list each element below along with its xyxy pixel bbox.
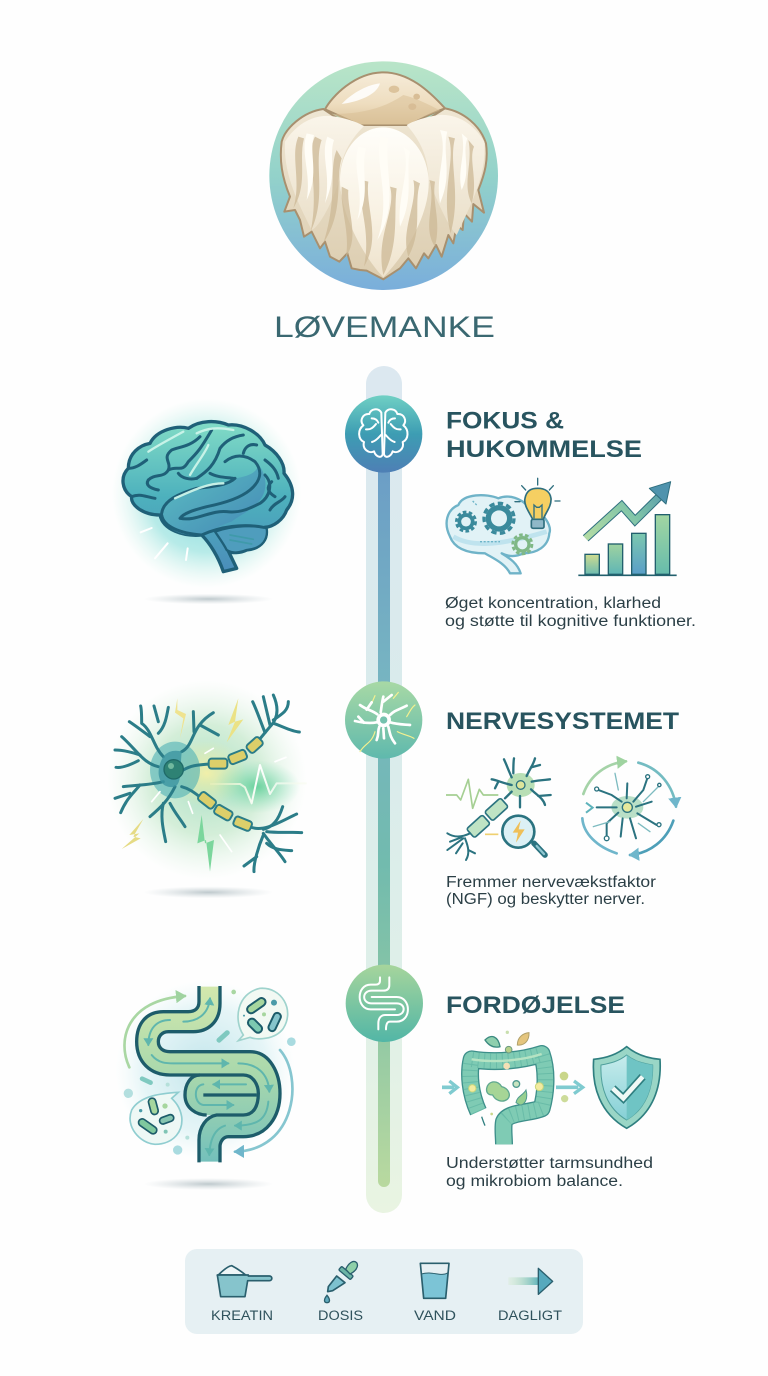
text: focus description <box>445 595 696 630</box>
illustration: neuron <box>107 680 307 898</box>
text: nerve description <box>446 874 656 908</box>
icon: water glass <box>420 1263 449 1298</box>
icon: dropper <box>324 1261 357 1303</box>
heading: Fokus & Hukommelse: HUKOMMELSE <box>446 436 642 463</box>
label: kreatin: KREATIN <box>211 1308 273 1323</box>
node: intestine <box>346 965 423 1042</box>
hero: lion's mane mushroom <box>269 61 498 290</box>
heading: Fokus & Hukommelse <box>446 408 642 463</box>
heading: Fordøjelse: FORDØJELSE <box>446 992 625 1019</box>
heading: Nervesystemet: NERVESYSTEMET <box>446 708 679 735</box>
icon: arrow <box>508 1268 553 1294</box>
label: vand: VAND <box>414 1308 456 1323</box>
icons: axon with magnifier and neuron cycle <box>446 758 676 860</box>
text: focus description: og støtte til kognitive funktioner. <box>445 613 696 630</box>
text: digestion description: og mikrobiom balance. <box>446 1173 623 1190</box>
label: dagligt: DAGLIGT <box>498 1308 562 1323</box>
icons: colon and protective shield <box>442 1031 660 1144</box>
label: dosis: DOSIS <box>318 1308 363 1323</box>
text: nerve description: (NGF) og beskytter nerver. <box>446 891 645 908</box>
timeline track <box>366 366 402 1213</box>
text: digestion description <box>446 1155 653 1190</box>
illustration: gut flow <box>115 980 296 1190</box>
icons: brain with gears, bulb and growth chart <box>447 478 677 575</box>
illustration: glowing brain <box>112 398 302 604</box>
text: focus description: Øget koncentration, klarhed <box>445 595 661 612</box>
panel: daily use legend <box>185 1249 583 1334</box>
heading: Fokus & Hukommelse: FOKUS & <box>446 408 564 434</box>
text: nerve description: Fremmer nervevækstfaktor <box>446 874 656 891</box>
title: LØVEMANKE <box>274 311 495 344</box>
icon: scoop <box>217 1266 272 1297</box>
text: digestion description: Understøtter tarmsundhed <box>446 1155 653 1172</box>
node: neuron <box>345 681 422 759</box>
node: brain <box>345 395 422 473</box>
